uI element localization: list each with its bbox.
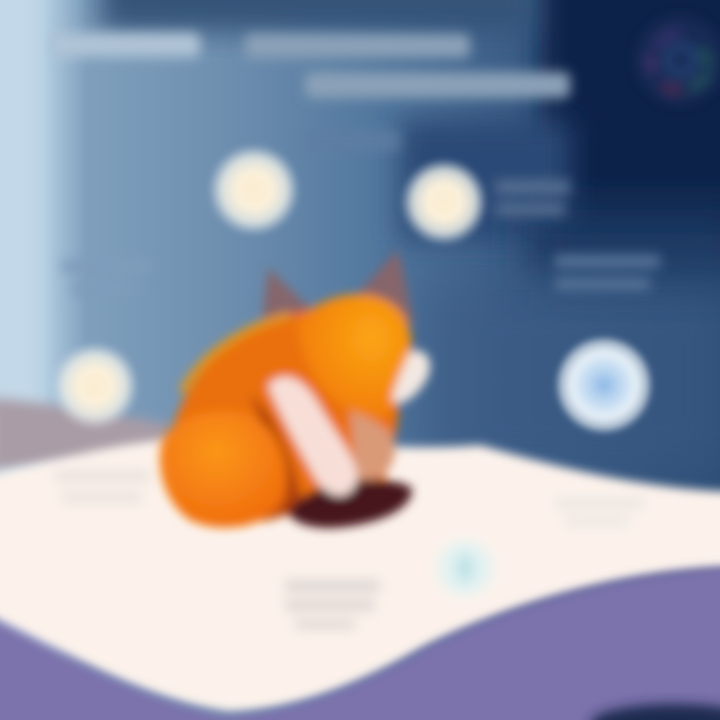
fox chest shadow	[250, 395, 305, 522]
icon: glowing blue orb right	[554, 335, 654, 435]
logo: circular emblem	[636, 16, 720, 104]
fox tail	[160, 411, 287, 528]
icon: glowing orb top right	[400, 158, 488, 246]
icon: small teal orb on snow	[438, 541, 492, 595]
caption: upper right	[495, 180, 570, 215]
dark corner shadow	[590, 704, 720, 720]
caption: top centre	[305, 130, 400, 152]
distant ground strip	[0, 398, 170, 470]
caption: right	[555, 255, 660, 290]
fox white chest	[268, 377, 357, 496]
fox back highlight	[182, 315, 290, 392]
fox ears	[262, 268, 312, 322]
fox dark legs	[288, 480, 412, 528]
caption: ground left	[55, 470, 150, 503]
fox body	[172, 309, 399, 510]
fox illustration	[160, 250, 430, 528]
icon: glowing orb top left	[208, 144, 300, 236]
fox head	[296, 294, 412, 419]
title	[50, 33, 570, 98]
caption: left	[62, 260, 150, 295]
purple foreground hill	[0, 566, 720, 720]
caption: ground right	[555, 497, 645, 526]
caption: ground centre	[285, 580, 380, 629]
fox lower chest	[350, 410, 395, 480]
snow ground	[0, 438, 720, 712]
fox muzzle	[392, 351, 430, 403]
icon: glowing orb left	[51, 342, 139, 430]
